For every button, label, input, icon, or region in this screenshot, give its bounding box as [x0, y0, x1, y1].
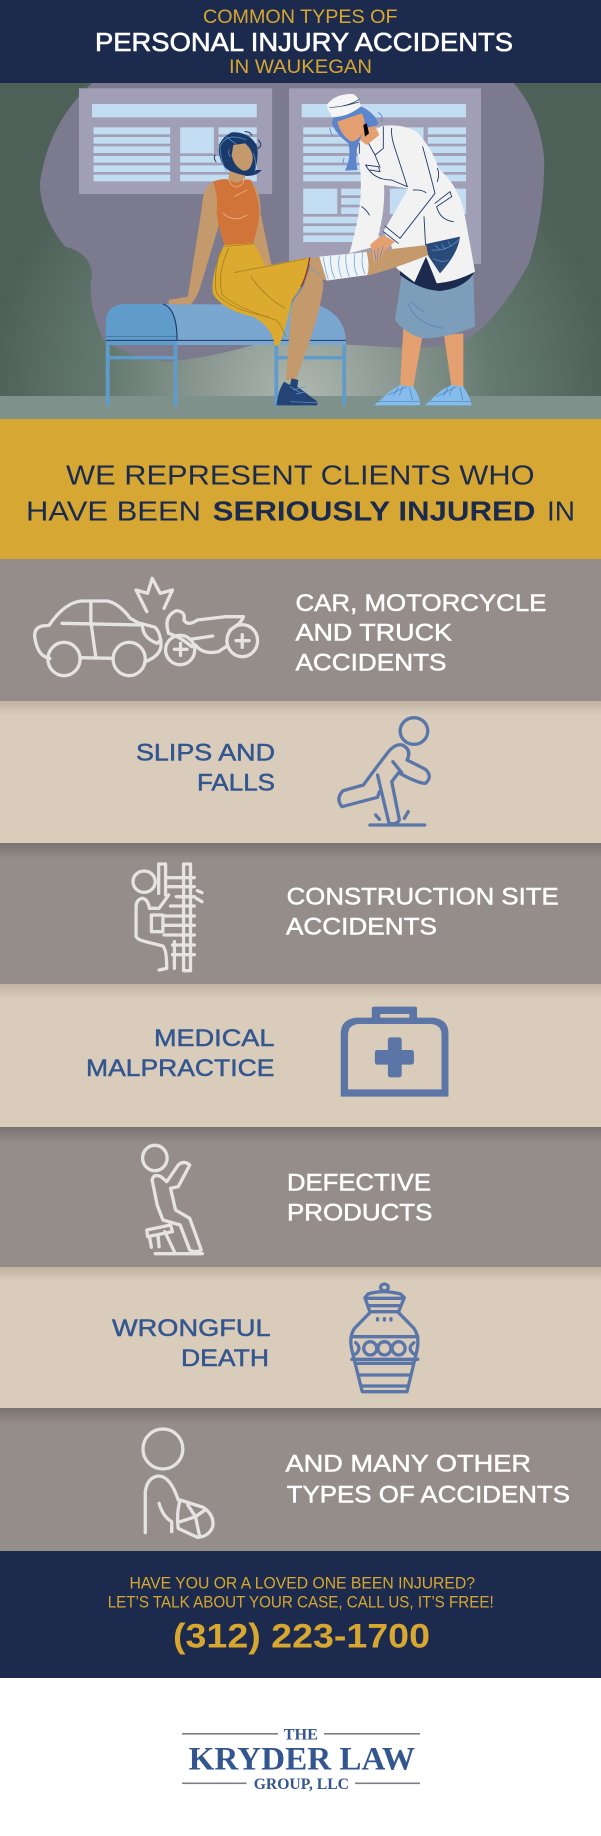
panel: medical malpractice [0, 984, 601, 1127]
label [286, 1451, 570, 1509]
label: FALLS [197, 770, 275, 797]
panel: call to action [0, 1551, 601, 1678]
heading line: personal injury accidents: PERSONAL INJURY ACCIDENTS [95, 27, 513, 57]
panel: illustration of doctor treating injured patient [0, 83, 601, 419]
banner line 2: SERIOUSLY INJURED [213, 496, 535, 527]
call to action text [108, 1574, 494, 1611]
bandage and raised shoe [277, 235, 460, 405]
label: MEDICAL [154, 1025, 274, 1052]
patient top [213, 179, 259, 245]
panel: defective products [0, 1127, 601, 1267]
patient skirt [212, 243, 310, 346]
banner line 2 [26, 496, 575, 527]
doctor upper body [327, 94, 475, 283]
standing shoe [277, 378, 317, 405]
label [112, 1315, 271, 1372]
heading line: common types of: COMMON TYPES OF [203, 6, 398, 28]
panel: wrongful death [0, 1267, 601, 1408]
phone number: (312) 223-1700 [173, 1618, 430, 1656]
icon: person with arm in cast [143, 1429, 213, 1537]
patient [169, 132, 460, 405]
icon: person on ladder [133, 864, 202, 971]
panel: logo footer [0, 1678, 601, 1836]
icon: person slipping [339, 718, 429, 825]
label: ACCIDENTS [286, 914, 437, 941]
label: AND TRUCK [296, 620, 453, 647]
call to action text: HAVE YOU OR A LOVED ONE BEEN INJURED? [130, 1574, 475, 1592]
doctor hat [327, 94, 361, 117]
panel: header [0, 0, 601, 83]
call to action text: LET’S TALK ABOUT YOUR CASE, CALL US, IT’S FREE! [108, 1593, 494, 1611]
wall chart right [289, 88, 481, 264]
patient raised leg [310, 245, 428, 280]
doctor lower body [374, 270, 475, 405]
heading line: in waukegan: IN WAUKEGAN [229, 56, 372, 78]
label: TYPES OF ACCIDENTS [287, 1482, 570, 1509]
label: DEFECTIVE [287, 1170, 431, 1197]
icon: person falling from broken stool [143, 1145, 202, 1254]
doctor hand [370, 235, 395, 262]
doctor [327, 94, 475, 405]
logo: the kryder law group: GROUP, LLC [254, 1776, 349, 1793]
banner line 2: HAVE BEEN [26, 496, 201, 527]
label [286, 884, 559, 941]
panel: and many other types of accidents [0, 1408, 601, 1551]
icon: car and motorcycle crash [35, 578, 258, 676]
label: ACCIDENTS [296, 650, 446, 677]
label [287, 1170, 432, 1227]
label [86, 1025, 274, 1082]
banner line 1: WE REPRESENT CLIENTS WHO [66, 459, 535, 490]
patient lower leg [286, 267, 323, 380]
label: DEATH [181, 1345, 269, 1372]
logo: the kryder law group: THE [284, 1726, 318, 1743]
label [296, 590, 546, 677]
panel: construction site accidents [0, 843, 601, 984]
wall chart left [79, 88, 272, 194]
label: CAR, MOTORCYCLE [296, 590, 546, 617]
bench [106, 304, 346, 406]
purple wall blob [40, 83, 544, 362]
panel: car, motorcycle and truck accidents [0, 559, 601, 701]
label: PRODUCTS [287, 1200, 432, 1227]
logo: the kryder law group [182, 1726, 420, 1793]
banner line 2: IN [547, 496, 575, 527]
panel: slips and falls [0, 701, 601, 843]
label: SLIPS AND [136, 740, 275, 767]
doctor neck and face [360, 126, 379, 145]
logo: the kryder law group: KRYDER LAW [189, 1741, 415, 1777]
label: AND MANY OTHER [286, 1451, 531, 1478]
patient arms [169, 182, 218, 305]
patient head [214, 132, 262, 187]
icon: medical kit [341, 1007, 448, 1097]
label: MALPRACTICE [86, 1055, 274, 1082]
label: WRONGFUL [112, 1315, 271, 1342]
icon: urn [351, 1284, 418, 1392]
panel: we represent banner [0, 419, 601, 559]
label [136, 740, 275, 797]
label: CONSTRUCTION SITE [287, 884, 559, 911]
